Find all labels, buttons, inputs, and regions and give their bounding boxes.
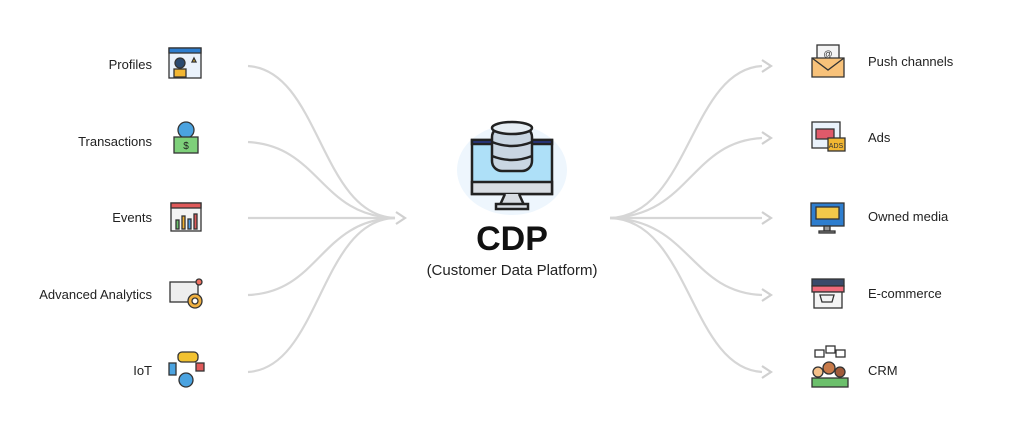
text: Transactions [78,134,152,149]
subtitle: (Customer Data Platform) [427,262,597,279]
text: Events [112,210,152,225]
icon: profiles [169,48,201,78]
icon: owned media [811,203,844,233]
icon: push channels: @ [823,49,833,59]
icon: e-commerce [812,279,844,308]
icon: advanced analytics [170,279,202,308]
icon: ads [812,122,845,151]
text: Advanced Analytics [39,287,152,302]
icon: transactions [174,122,198,153]
right labels: Push channels [868,54,953,69]
text: E-commerce [868,286,942,301]
icon: crm [812,346,848,387]
text: IoT [133,363,152,378]
title: CDP: CDP [476,220,548,258]
icon: transactions: $ [183,141,189,152]
icon: push channels [812,45,844,77]
icon: iot [169,352,204,387]
icon: cdp database monitor [457,122,567,215]
left labels: Profiles [109,57,152,72]
icon: events [171,203,201,231]
text: Owned media [868,209,948,224]
icon: ads: ADS [829,143,844,150]
text: CRM [868,363,898,378]
text: Ads [868,130,890,145]
